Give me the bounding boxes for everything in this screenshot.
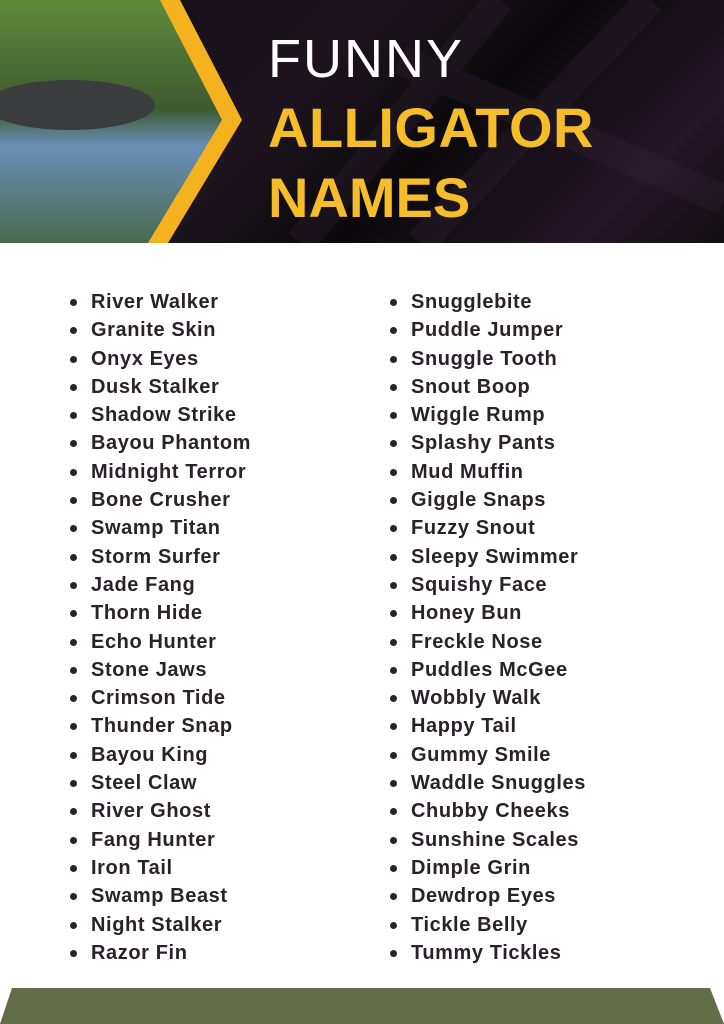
list: column 2: Puddle Jumper <box>411 319 563 341</box>
list: column 2: Dimple Grin <box>411 857 531 879</box>
list: column 2: Sleepy Swimmer <box>411 546 578 568</box>
list: column 2: Snuggle Tooth <box>411 348 557 370</box>
list: column 2: Giggle Snaps <box>411 489 546 511</box>
list: column 1: Thorn Hide <box>91 602 203 624</box>
list: column 1: Iron Tail <box>91 857 173 879</box>
title: ALLIGATOR <box>268 96 594 159</box>
list: column 1: Crimson Tide <box>91 687 226 709</box>
list: column 1: Jade Fang <box>91 574 195 596</box>
list: column 2: Honey Bun <box>411 602 522 624</box>
list: column 2: Fuzzy Snout <box>411 517 535 539</box>
list: column 1: Bone Crusher <box>91 489 230 511</box>
list: column 1: Shadow Strike <box>91 404 237 426</box>
list: column 1: Swamp Beast <box>91 885 228 907</box>
list: column 2: Splashy Pants <box>411 432 556 454</box>
list: column 2: Tummy Tickles <box>411 942 561 964</box>
list: column 2: Waddle Snuggles <box>411 772 586 794</box>
title: NAMES <box>268 166 470 229</box>
title: FUNNY <box>268 29 464 89</box>
list: column 2: Chubby Cheeks <box>411 800 570 822</box>
list: column 2: Tickle Belly <box>411 914 528 936</box>
list: column 2: Freckle Nose <box>411 631 543 653</box>
list: column 2: Happy Tail <box>411 715 517 737</box>
header photo and chevron <box>0 0 724 243</box>
list: column 1: Onyx Eyes <box>91 348 199 370</box>
list: column 2: Squishy Face <box>411 574 547 596</box>
list: column 1: Razor Fin <box>91 942 188 964</box>
title <box>268 29 594 229</box>
list: column 2: Gummy Smile <box>411 744 551 766</box>
list: column 1: Dusk Stalker <box>91 376 219 398</box>
list: column 1: Midnight Terror <box>91 461 246 483</box>
list: column 1: Thunder Snap <box>91 715 233 737</box>
list: column 1: Storm Surfer <box>91 546 220 568</box>
list: column 2: Dewdrop Eyes <box>411 885 556 907</box>
list: column 1: Steel Claw <box>91 772 197 794</box>
list: column 1: Bayou Phantom <box>91 432 251 454</box>
list: column 2: Wobbly Walk <box>411 687 541 709</box>
list: column 2: Mud Muffin <box>411 461 524 483</box>
footer band <box>0 988 724 1024</box>
list: column 1: Granite Skin <box>91 319 216 341</box>
list: column 1: Fang Hunter <box>91 829 215 851</box>
list: column 1 <box>70 291 251 964</box>
list: column 1: River Walker <box>91 291 219 313</box>
header banner <box>0 0 724 243</box>
list: column 2: Puddles McGee <box>411 659 568 681</box>
list: column 1: Swamp Titan <box>91 517 221 539</box>
list: column 1: Bayou King <box>91 744 208 766</box>
list: column 2: Snout Boop <box>411 376 530 398</box>
list: column 1: Night Stalker <box>91 914 222 936</box>
list: column 1: Stone Jaws <box>91 659 207 681</box>
list: column 2 <box>390 291 586 964</box>
list: column 2: Snugglebite <box>411 291 532 313</box>
list: column 2: Wiggle Rump <box>411 404 545 426</box>
list: column 2: Sunshine Scales <box>411 829 579 851</box>
list: column 1: Echo Hunter <box>91 631 216 653</box>
list: column 1: River Ghost <box>91 800 211 822</box>
